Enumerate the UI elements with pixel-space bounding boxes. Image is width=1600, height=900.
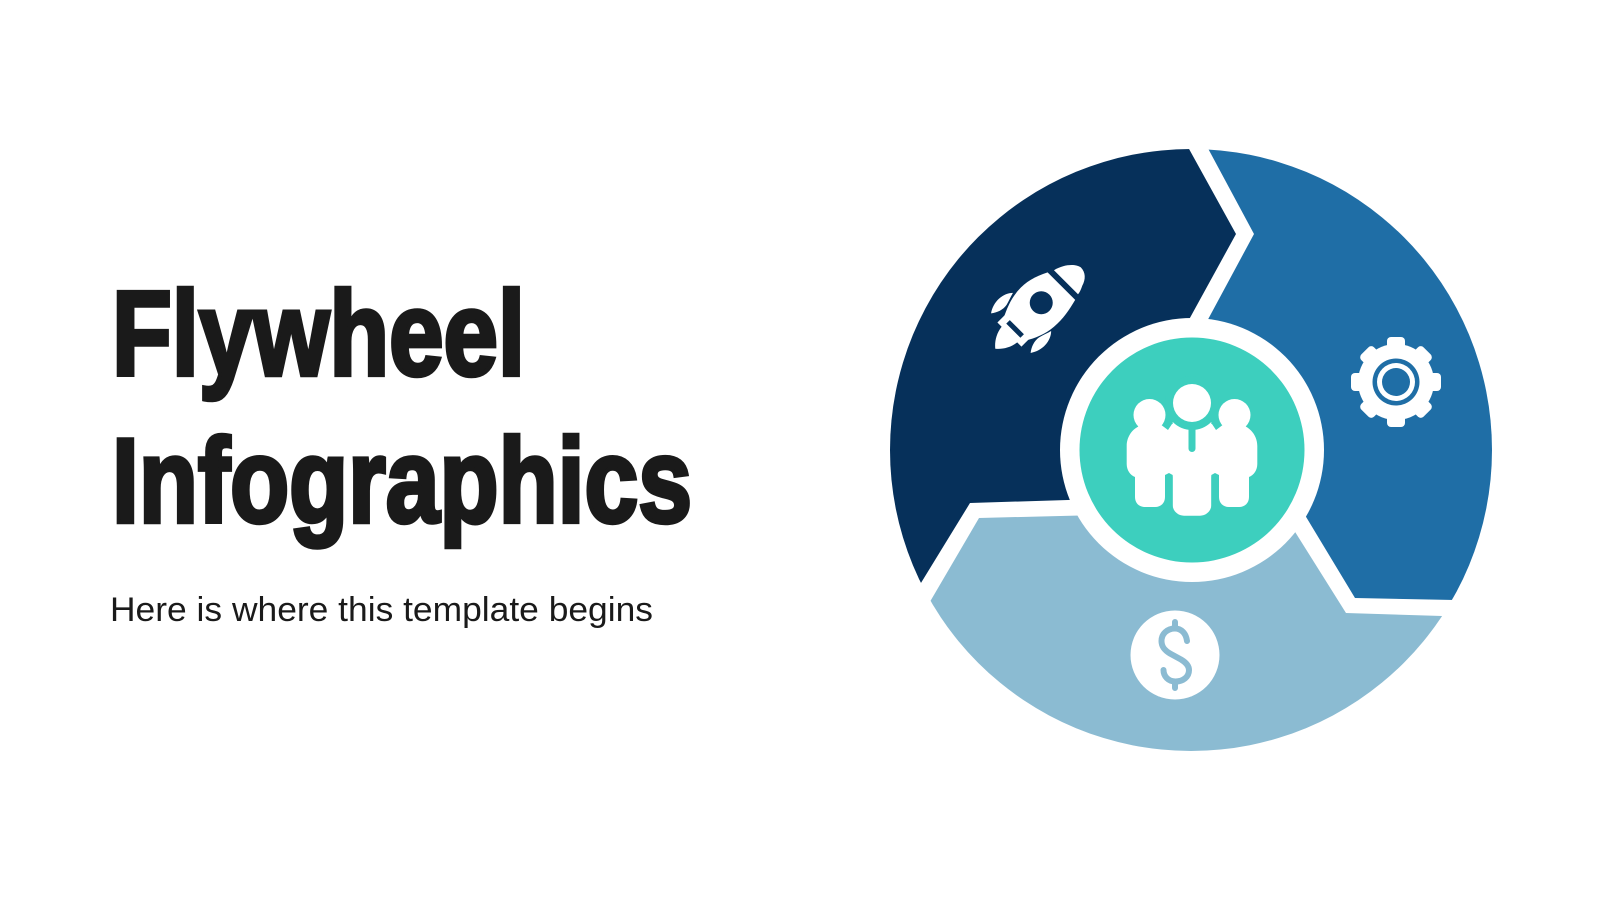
- subtitle: Here is where this template begins: [110, 591, 653, 629]
- icon: gear: [1351, 337, 1441, 427]
- icon: team of people: [1127, 376, 1257, 516]
- center ring: [1060, 318, 1324, 582]
- title: Flywheel: [112, 267, 525, 401]
- title: [112, 267, 692, 548]
- flywheel diagram: [890, 149, 1492, 751]
- segment: dark navy: [890, 149, 1236, 583]
- title: Infographics: [112, 414, 692, 548]
- segment: mid blue: [1208, 150, 1492, 600]
- center hub: [1080, 338, 1304, 562]
- icon: rocket: [972, 242, 1102, 372]
- icon: dollar coin: [1130, 610, 1220, 700]
- segment: light blue: [930, 516, 1442, 751]
